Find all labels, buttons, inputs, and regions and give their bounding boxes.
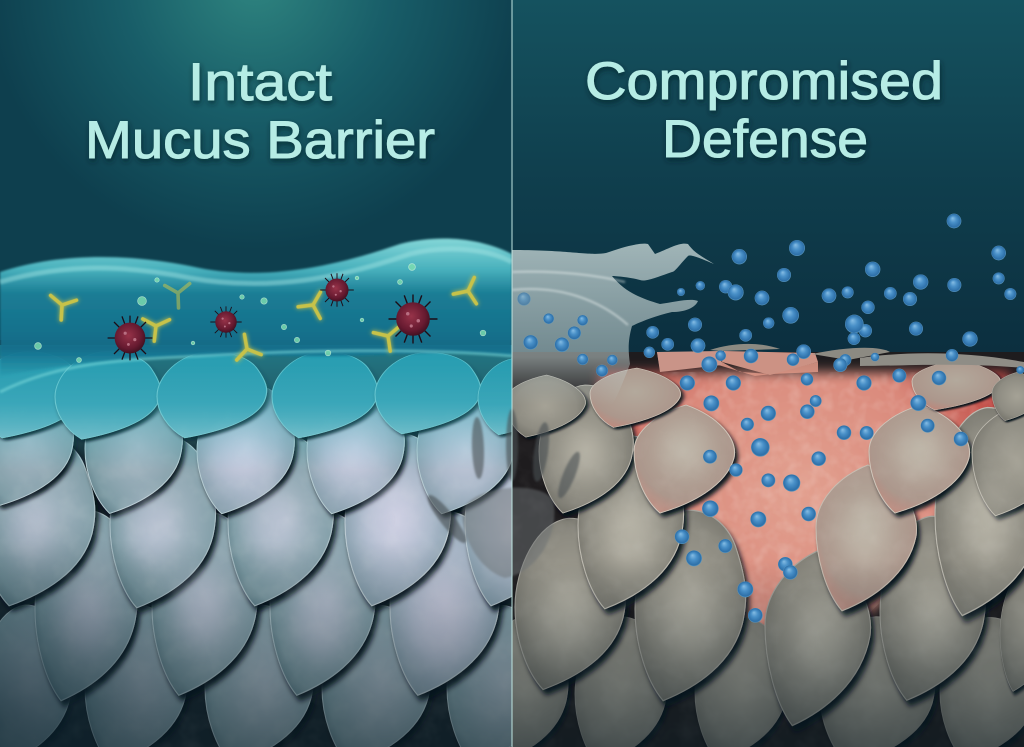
torn mucus layer [512,244,714,405]
right vignette [512,560,1024,747]
mucus layer [0,239,512,376]
heading: Compromised Defense: Compromised [585,52,943,111]
left scale base [0,340,512,747]
right background [512,0,1024,216]
left iridescent scales [0,351,567,747]
antibody [453,272,486,305]
virus small middle [210,306,242,338]
left scale mottling [0,460,511,747]
panel: compromised defense (right) [480,0,1024,747]
right scale base [512,352,1024,747]
heading: Compromised Defense [585,52,943,169]
virus large right [388,294,438,344]
antibody [143,309,175,342]
left background [0,0,511,272]
panel: intact mucus barrier (left) [0,0,567,747]
virus large left [108,316,152,360]
divider line [511,0,513,747]
pink flaking plates [657,352,818,376]
torn mucus highlight [512,272,628,325]
virus small right [320,273,354,307]
right scale mottling [513,483,990,705]
small mucus bubbles [35,264,486,362]
antibodies and viruses [35,264,486,362]
worn scale highlights [540,426,1009,682]
mucus lower shine [0,351,512,392]
heading: Intact Mucus Barrier [85,53,435,170]
antibody [368,322,400,356]
left vignette [0,540,512,747]
teal glow over upper scales [0,345,512,470]
antibody [233,332,261,360]
heading: Compromised Defense: Defense [662,110,868,169]
heading: Intact Mucus Barrier: Intact [188,53,332,112]
icon: fading handprint [423,409,584,578]
heading: Intact Mucus Barrier: Mucus Barrier [85,111,435,170]
blue water droplets [517,214,1024,623]
antibody [298,286,332,319]
right worn scales [480,344,1024,747]
antibody [43,285,77,320]
inflamed skin [591,362,1016,625]
antibody pale [165,284,191,308]
iridescent highlights on scales [10,433,470,660]
mucus highlight band [0,249,512,284]
skin texture [603,372,1004,622]
